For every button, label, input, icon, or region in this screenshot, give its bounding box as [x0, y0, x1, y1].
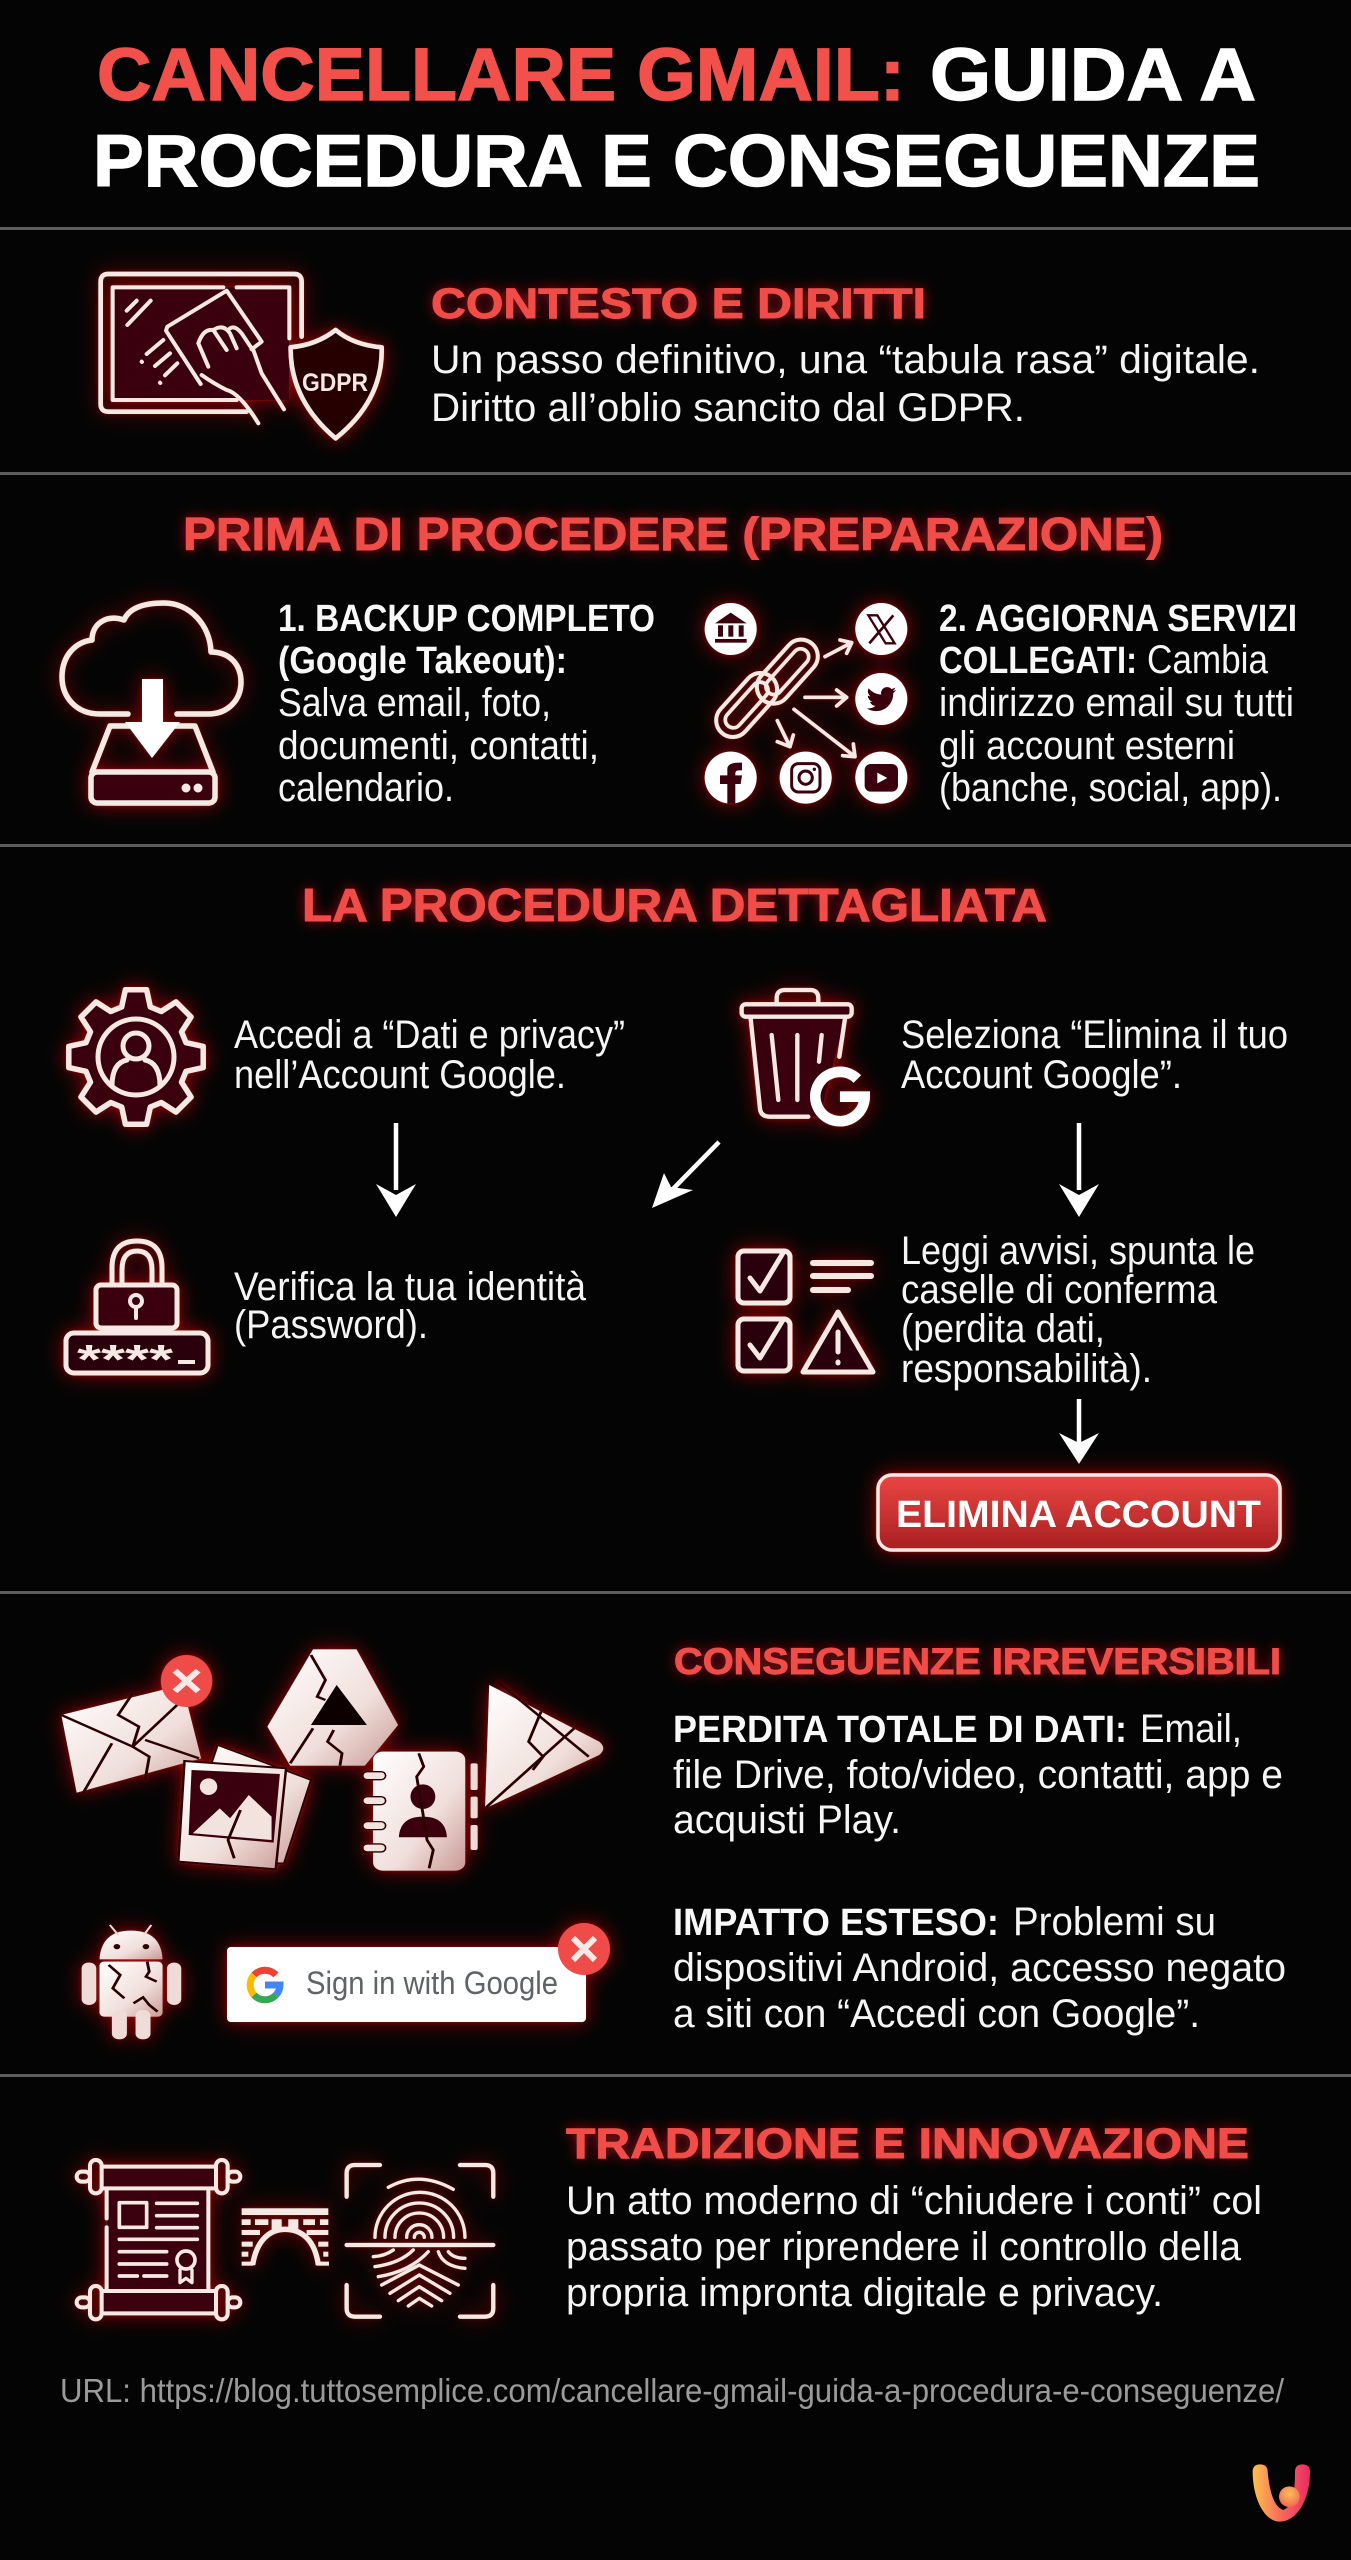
icon: scroll — [77, 2160, 240, 2319]
button: elimina account — [878, 1475, 1280, 1550]
text: backup completo — [278, 598, 655, 810]
panel: procedura dettagliata — [66, 879, 1288, 1550]
text: step dati e privacy: nell’Account Google. — [234, 1053, 566, 1097]
icon: padlock with password field — [66, 1241, 208, 1383]
text: impatto esteso: IMPATTO ESTESO: — [673, 1902, 999, 1944]
text: tradizione: Un atto moderno di “chiudere i conti” col — [566, 2179, 1262, 2223]
text: step elimina account — [901, 1013, 1288, 1097]
text: step avvisi e conferma: responsabilità). — [901, 1347, 1152, 1391]
button: elimina account: ELIMINA ACCOUNT — [896, 1494, 1261, 1536]
text: backup completo: documenti, contatti, — [278, 724, 599, 768]
panel: conseguenze irreversibili — [61, 1641, 1286, 2039]
text: step verifica identità — [234, 1265, 587, 1347]
text: step elimina account: Seleziona “Elimina il tuo — [901, 1013, 1288, 1057]
icon: broken contacts book — [363, 1752, 478, 1871]
heading: prima di procedere: PRIMA DI PROCEDERE (PREPARAZIONE) — [183, 508, 1163, 560]
badge: red x on envelope — [161, 1655, 212, 1707]
icon: gear with user — [69, 990, 203, 1124]
text: step verifica identità: (Password). — [234, 1303, 428, 1347]
panel: prima di procedere — [62, 508, 1297, 810]
text: backup completo: (Google Takeout): — [278, 640, 567, 682]
text: impatto esteso: Problemi su — [1013, 1900, 1216, 1944]
text: perdita totale di dati: Email, — [1140, 1707, 1242, 1751]
panel: contesto e diritti — [101, 274, 1260, 438]
text: backup completo: calendario. — [278, 766, 454, 810]
text: step dati e privacy — [234, 1013, 625, 1097]
text: aggiorna servizi collegati: gli account esterni — [939, 724, 1235, 768]
text: step avvisi e conferma: (perdita dati, — [901, 1307, 1105, 1351]
text: perdita totale di dati: file Drive, foto/video, contatti, app e — [673, 1753, 1283, 1797]
arrow: trash to checks — [1059, 1123, 1099, 1217]
heading: conseguenze irreversibili: CONSEGUENZE IRREVERSIBILI — [674, 1641, 1281, 1682]
text: perdita totale di dati: acquisti Play. — [673, 1798, 901, 1842]
arrow: diagonal to verify — [652, 1142, 719, 1208]
text: tradizione — [566, 2179, 1262, 2315]
source url: URL: https://blog.tuttosemplice.com/cancellare-gmail-guida-a-procedura-e-conseguenze/ — [60, 2372, 1285, 2409]
text: tradizione: passato per riprendere il controllo della — [566, 2225, 1242, 2269]
icon: bridge — [242, 2208, 329, 2266]
icon: broken envelope — [61, 1685, 201, 1793]
text: impatto esteso: dispositivi Android, accesso negato — [673, 1946, 1286, 1990]
text: step elimina account: Account Google”. — [901, 1053, 1182, 1097]
text: step avvisi e conferma — [901, 1229, 1255, 1391]
heading: procedura dettagliata: LA PROCEDURA DETTAGLIATA — [302, 879, 1047, 931]
heading: tradizione e innovazione: TRADIZIONE E INNOVAZIONE — [566, 2120, 1249, 2168]
text: aggiorna servizi collegati: Cambia — [1147, 638, 1269, 682]
icon: padlock with password field: **** — [77, 1336, 174, 1383]
button: sign in with google: Sign in with Google — [306, 1965, 558, 2001]
arrow: gear to lock — [376, 1123, 416, 1217]
panel: tradizione e innovazione — [77, 2120, 1262, 2319]
text: aggiorna servizi collegati — [939, 598, 1297, 810]
text: impatto esteso: a siti con “Accedi con Google”. — [673, 1992, 1200, 2036]
icon: broken drive — [267, 1649, 398, 1766]
icon: fingerprint — [347, 2165, 493, 2317]
text: step verifica identità: Verifica la tua identità — [234, 1265, 587, 1309]
icon: checkboxes and warning — [738, 1251, 873, 1372]
icon: trash with Google G — [742, 990, 865, 1121]
logo — [1253, 2464, 1310, 2522]
icon: broken play triangle — [485, 1682, 603, 1808]
text: contesto: Un passo definitivo, una “tabula rasa” digitale. — [431, 338, 1260, 382]
icon: broken android — [82, 1925, 181, 2039]
title: PROCEDURA E CONSEGUENZE — [93, 121, 1260, 202]
text: tradizione: propria impronta digitale e privacy. — [566, 2271, 1163, 2315]
heading: contesto e diritti: CONTESTO E DIRITTI — [431, 280, 926, 328]
icon: chain linked to services — [705, 603, 907, 804]
icon: cloud download to drive — [62, 603, 241, 803]
text: backup completo: 1. BACKUP COMPLETO — [278, 598, 655, 640]
title: CANCELLARE GMAIL: — [97, 33, 905, 116]
text: step dati e privacy: Accedi a “Dati e privacy” — [234, 1013, 625, 1057]
text: step avvisi e conferma: caselle di conferma — [901, 1268, 1218, 1312]
text: aggiorna servizi collegati: (banche, social, app). — [939, 766, 1282, 810]
text: perdita totale di dati: PERDITA TOTALE DI DATI: — [673, 1709, 1127, 1751]
text: contesto: Diritto all’oblio sancito dal GDPR. — [431, 386, 1025, 430]
icon: tablet wiped by hand with GDPR shield: GDPR — [302, 369, 368, 397]
icon: tablet wiped by hand with GDPR shield — [101, 274, 382, 438]
icons: broken Google services — [61, 1649, 603, 2039]
title: GUIDA A — [930, 33, 1256, 116]
text: backup completo: Salva email, foto, — [278, 681, 551, 725]
text: aggiorna servizi collegati: indirizzo email su tutti — [939, 681, 1294, 725]
text: aggiorna servizi collegati: COLLEGATI: — [939, 640, 1137, 682]
text: step avvisi e conferma: Leggi avvisi, spunta le — [901, 1229, 1255, 1273]
arrow: checks to button — [1059, 1399, 1099, 1464]
icons: scroll, bridge, fingerprint — [77, 2160, 493, 2319]
text: impatto esteso — [673, 1900, 1286, 2036]
button: sign in with google — [227, 1923, 610, 2022]
text: contesto — [431, 338, 1260, 430]
text: perdita totale di dati — [673, 1707, 1283, 1842]
title — [93, 33, 1260, 202]
text: aggiorna servizi collegati: 2. AGGIORNA SERVIZI — [939, 598, 1297, 640]
icon: broken photos — [178, 1745, 311, 1869]
